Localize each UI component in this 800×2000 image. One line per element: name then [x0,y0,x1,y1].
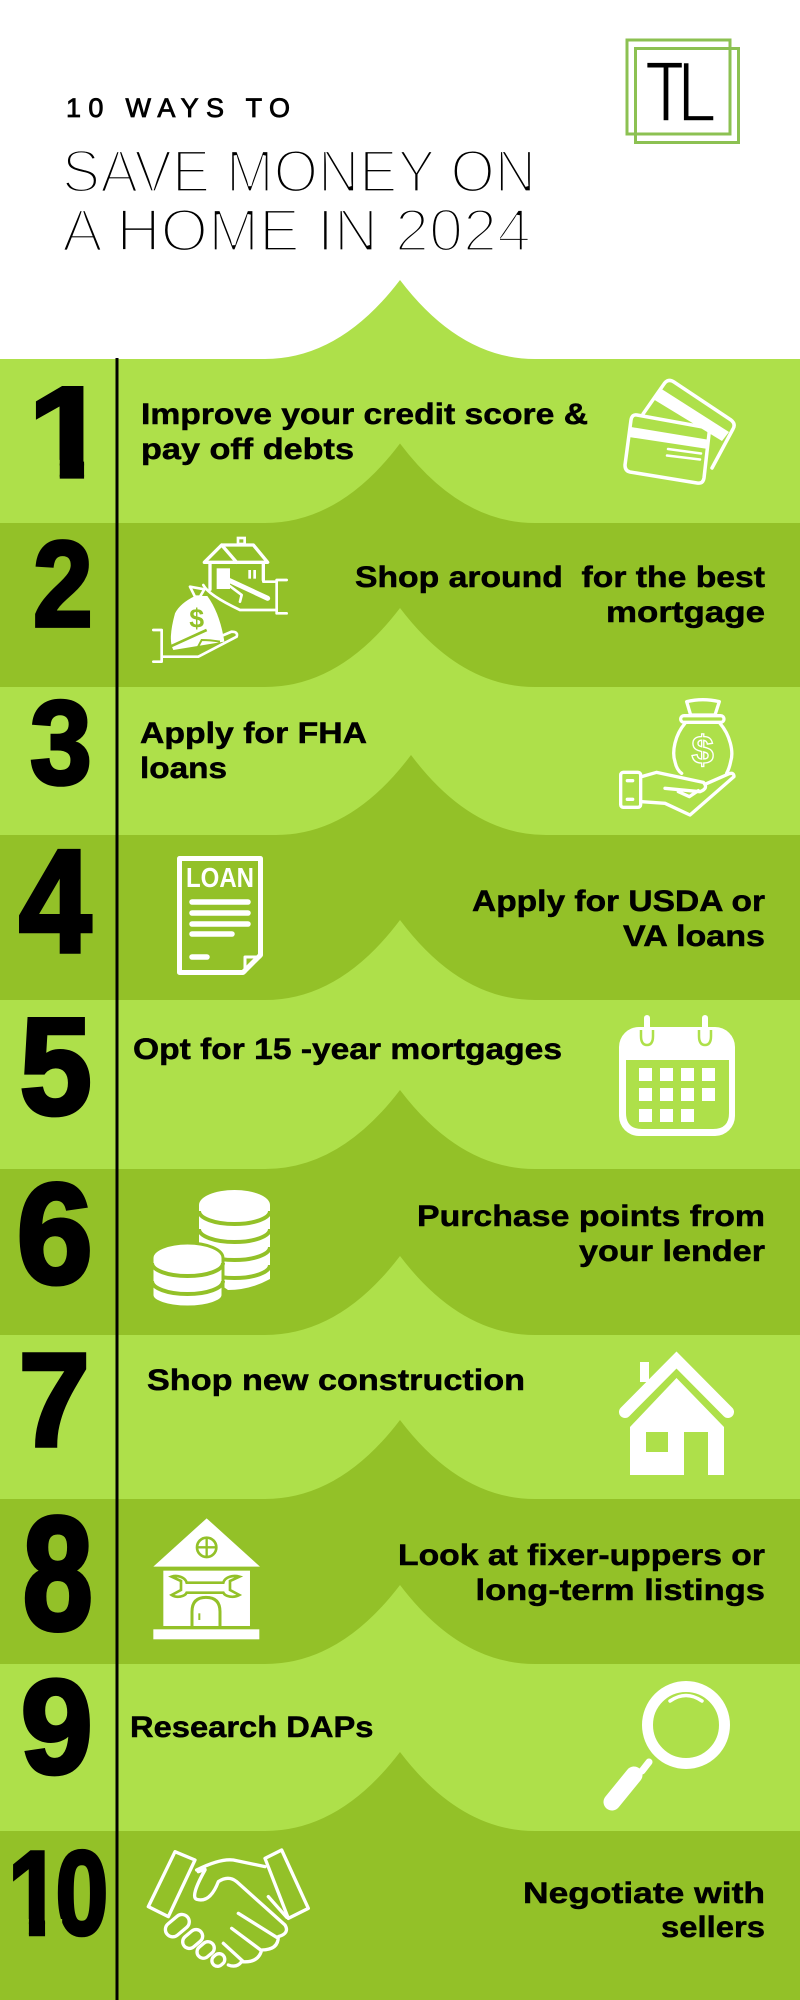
text: step 2: Shop around for the best [355,561,765,594]
text: step 4 [472,885,765,953]
number 1: 1 [28,360,108,504]
text: step 4: VA loans [623,920,765,953]
panel: step 8 [0,1420,800,1664]
icon: loan document [180,858,260,972]
text: step 8 [398,1539,765,1607]
heading: save money on: SAVE MONEY ON [62,138,536,205]
text: step 6 [417,1200,765,1268]
icon: hand holding money bag [621,700,734,815]
logo: TL monogram: T [645,44,687,140]
heading: 10 ways to: 10 WAYS TO [66,93,290,123]
panel: step 5 [0,920,800,1169]
icon: calendar [619,1018,735,1136]
text: step 9: Research DAPs [130,1711,374,1744]
icon: handshake [148,1850,308,1969]
panel: step 9 [0,1585,800,1831]
number 7: 7 [19,1325,90,1474]
text: step 10 [523,1877,765,1944]
text: step 7: Shop new construction [147,1364,525,1397]
icon: house and money bag in hands [153,538,287,662]
icon: credit cards [625,380,734,483]
panel: step 1 [0,280,800,523]
text: step 8: long-term listings [476,1574,765,1607]
text: step 6: Purchase points from [417,1200,765,1233]
text: step 10: Negotiate with [523,1877,765,1910]
icon: house [625,1360,728,1475]
panel: step 10 [0,1752,800,2000]
text: step 1 [141,398,588,466]
icon: loan document: LOAN [186,862,254,893]
panel: step 4 [0,755,800,1000]
text: step 3: loans [140,752,227,785]
text: step 3 [140,717,367,785]
text: step 8: Look at fixer-uppers or [398,1539,765,1572]
text: step 6: your lender [579,1235,765,1268]
logo: TL monogram: L [677,43,717,140]
panel: step 2 [0,444,800,687]
text: step 4: Apply for USDA or [472,885,765,918]
text: step 2 [355,561,765,629]
number 10: 10 [8,1826,108,1960]
number 3: 3 [30,677,92,809]
text: step 10: sellers [661,1911,765,1944]
icon: hand holding money bag: $ [692,728,714,772]
heading: a home in 2024: A HOME IN 2024 [62,197,531,264]
icon: house and money bag in hands: $ [189,603,204,633]
timeline vertical line [116,358,118,2000]
number 5: 5 [20,990,92,1144]
number 4: 4 [19,821,91,983]
number 8: 8 [23,1483,93,1664]
text: step 3: Apply for FHA [140,717,367,750]
text: step 5: Opt for 15 -year mortgages [133,1033,562,1066]
header: title block [62,93,536,264]
text: step 2: mortgage [606,596,765,629]
text: step 1: pay off debts [141,433,354,466]
number 2: 2 [33,517,93,652]
number 6: 6 [17,1153,93,1314]
panel: step 3 [0,608,800,835]
panel: step 6 [0,1090,800,1335]
text: step 1: Improve your credit score & [141,398,588,431]
panel: step 7 [0,1256,800,1499]
number 9: 9 [21,1652,93,1801]
icon: house with wrench [153,1518,260,1639]
logo: TL monogram [627,40,738,142]
icon: coin stacks [152,1190,270,1307]
icon: magnifying glass [612,1686,724,1802]
